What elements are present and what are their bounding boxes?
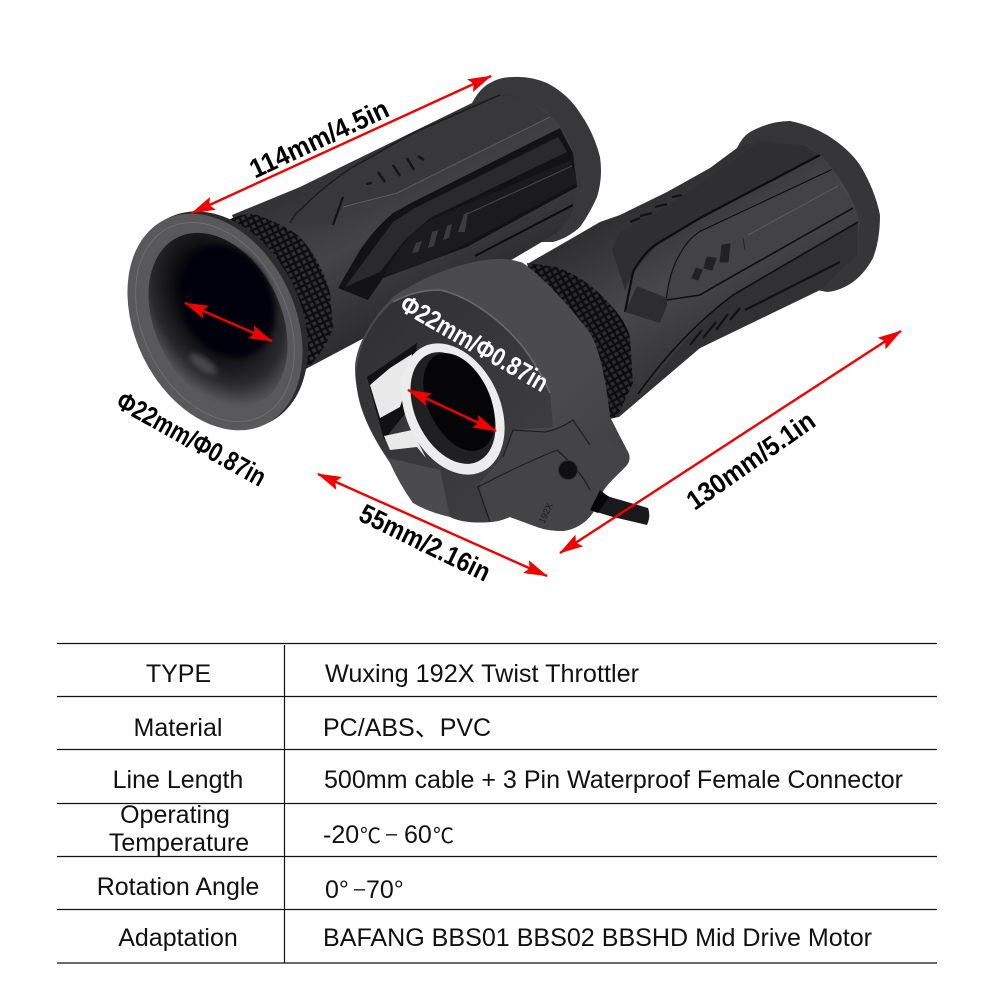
centre hole [394,338,512,478]
dimension: left bore label: Φ22mm/Φ0.87in [111,386,271,492]
flange rim of left grip [95,182,343,458]
row: material [134,714,491,742]
grip body of right grip [529,140,860,420]
row: type [146,660,639,688]
switch housing [478,420,630,531]
row: rotation angle [97,873,404,904]
far flange of left grip [472,77,601,242]
dimension: 114mm length arrow [192,76,491,213]
specification table [57,644,937,963]
row: line length: Line Length [113,766,243,794]
row: operating temperature: – [386,823,398,845]
dimension: left bore arrow [185,303,272,341]
row: material: Material [134,714,222,742]
row: operating temperature: ℃ [360,825,381,848]
dimension: 55mm arrow [318,474,547,576]
knurled ring of left grip [228,214,333,380]
ribs and logo panels of right grip [612,142,858,398]
row: adaptation: Adaptation [118,924,238,952]
collar face [356,290,553,522]
row: rotation angle: 0° [325,876,349,904]
row: rotation angle: – [354,878,366,900]
row: rotation angle: 70° [366,876,404,904]
dimension: 130mm arrow [560,331,901,553]
far flange of right grip [737,121,880,292]
mounting screw [558,460,578,480]
cable sleeve [590,490,609,513]
row: line length: 500mm cable + 3 Pin Waterproof Female Connector [324,766,903,794]
flange face of left grip [93,184,337,460]
right throttle grip [355,121,880,531]
grip body of left grip [232,95,577,372]
row: adaptation: BAFANG BBS01 BBS02 BBSHD Mid Drive Motor [323,924,872,952]
left throttle grip [93,77,601,460]
row: operating temperature [109,801,454,857]
white tab with slot [367,343,417,440]
funnel opening of left grip [121,210,315,430]
twist collar [355,259,630,531]
dimension: 114mm label: 114mm/4.5in [245,94,394,184]
dimension: 55mm label: 55mm/2.16in [355,498,495,588]
row: type: TYPE [146,660,211,688]
dimension: collar bore arrow [408,390,496,431]
ribs and logo panels of left grip [290,95,577,300]
row: rotation angle: Rotation Angle [97,873,259,901]
moulded housing label: 192X [537,502,555,525]
row: operating temperature: Temperature [109,829,249,857]
knurled ring of right grip [527,263,633,425]
metal ring [381,327,525,491]
row: operating temperature: Operating [120,801,230,829]
dimension: collar bore label: Φ22mm/Φ0.87in [395,289,554,398]
row: operating temperature: 60 [404,821,432,849]
dimension: 130mm label: 130mm/5.1in [681,405,821,516]
row: material: PC/ABS、PVC [323,714,491,742]
row: type: Wuxing 192X Twist Throttler [325,660,639,688]
cable [590,492,649,525]
row: operating temperature: ℃ [433,825,454,848]
row: operating temperature: -20 [323,821,359,849]
